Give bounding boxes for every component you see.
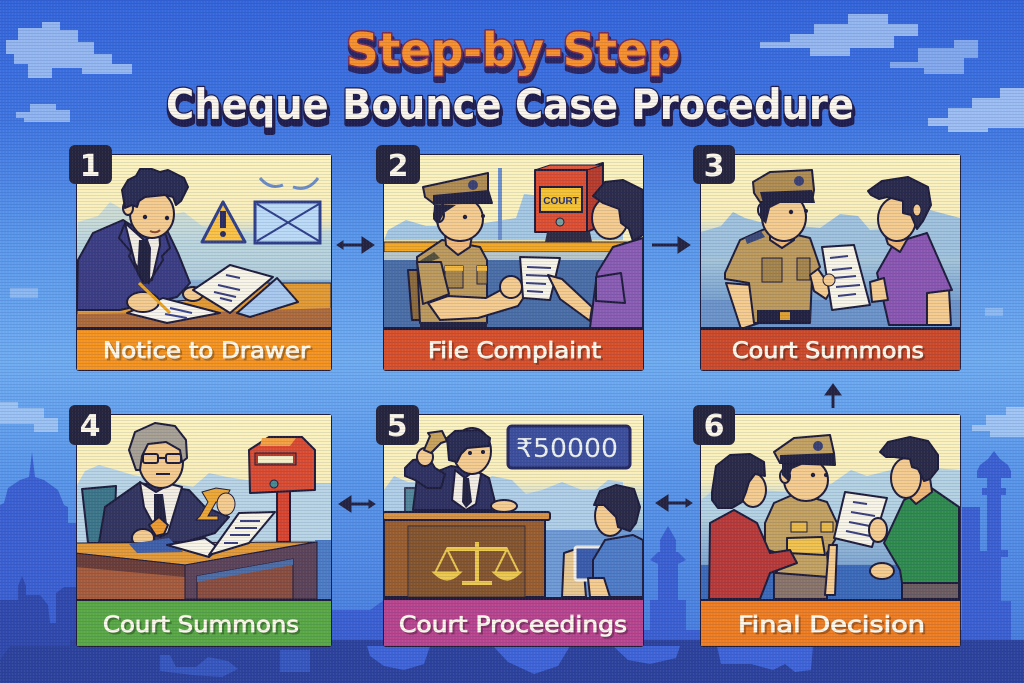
label bar: notice to drawer: Notice to Drawer (103, 339, 311, 364)
label bar: court summons (77, 601, 331, 646)
number badge 3 (693, 145, 735, 184)
number badge 6: 6 (704, 409, 724, 444)
city silhouette: far skyline (0, 451, 1024, 683)
panel: step 4 court summons (75, 414, 332, 647)
panel: step 1 notice to drawer (76, 154, 332, 371)
number badge 3: 3 (704, 149, 724, 184)
label bar: court proceedings: Court Proceedings (401, 615, 629, 640)
panel: step 6 final decision (700, 414, 961, 647)
number badge 1 (69, 145, 112, 184)
illustration: officer handing over summons (701, 155, 960, 329)
number badge 2: 2 (388, 149, 408, 184)
title (166, 23, 855, 134)
label bar: court summons: Court Summons (732, 339, 924, 364)
panel: step 3 court summons (700, 154, 961, 371)
arrow: step 5 to 4 (339, 496, 375, 512)
fine sign (508, 426, 630, 468)
label bar: court proceedings: Court Proceedings (399, 613, 627, 638)
illustration: parties and officer with decision (701, 415, 960, 599)
label bar: court summons: Court Summons (105, 615, 301, 640)
illustration: police officer and complainant (384, 155, 643, 328)
title line 1: Step-by-Step (347, 28, 681, 82)
label bar: file complaint: File Complaint (430, 341, 603, 366)
title line 2: Cheque Bounce Case Procedure (167, 85, 855, 134)
number badge 4 (69, 405, 111, 445)
label bar: court proceedings (384, 600, 643, 646)
illustration: judge at desk with post box (75, 415, 331, 600)
court box: COURT (543, 196, 579, 207)
number badge 2 (376, 145, 420, 184)
arrow: step 2 to 3 (652, 237, 690, 253)
court box (535, 163, 603, 242)
panel: step 5 court proceedings (383, 414, 644, 647)
panel: step 2 file complaint (383, 154, 644, 371)
label bar: court summons (701, 330, 960, 370)
number badge 1: 1 (80, 149, 100, 184)
arrow: step 1 to 2 (337, 237, 374, 253)
label bar: final decision (701, 601, 960, 646)
label bar: court summons: Court Summons (734, 341, 926, 366)
fine sign: ₹50000 (516, 434, 618, 464)
label bar: notice to drawer (77, 330, 331, 370)
clouds (0, 14, 1024, 437)
label bar: final decision: Final Decision (738, 613, 925, 638)
illustration: judge with gavel, scales and party (383, 415, 643, 597)
label bar: final decision: Final Decision (740, 615, 927, 640)
number badge 5: 5 (387, 409, 407, 444)
number badge 4: 4 (80, 409, 100, 444)
label bar: file complaint: File Complaint (428, 339, 601, 364)
number badge 5 (376, 405, 419, 445)
arrow: step 6 to 3 (825, 384, 841, 408)
illustration: lawyer writing notice (77, 155, 332, 327)
icon: gold scale held by judge (196, 488, 235, 520)
label bar: court summons: Court Summons (103, 613, 299, 638)
label bar: notice to drawer: Notice to Drawer (105, 341, 313, 366)
title line 1: Step-by-Step (346, 23, 680, 77)
number badge 6 (693, 405, 735, 445)
icon: scales of justice (435, 542, 519, 583)
title line 2: Cheque Bounce Case Procedure (166, 80, 854, 129)
arrow: step 6 to 5 (656, 495, 692, 511)
city silhouette: lower band (0, 576, 1024, 683)
label bar: file complaint (384, 330, 643, 370)
